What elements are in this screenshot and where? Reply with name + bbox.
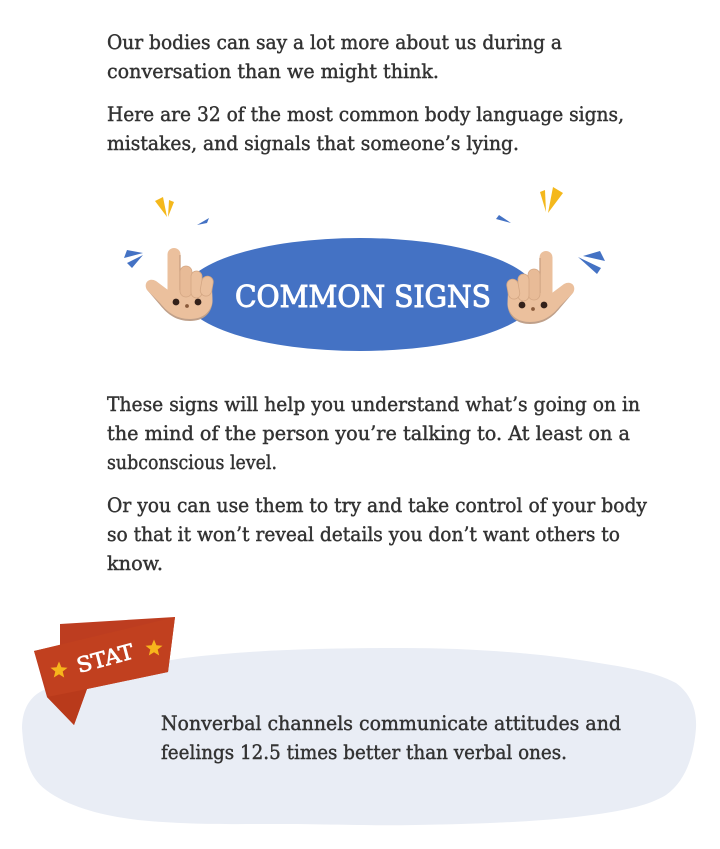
stat text bbox=[161, 712, 621, 764]
intro text block: Our bodies can say a lot more about us during a bbox=[107, 31, 562, 54]
heading: COMMON SIGNS bbox=[235, 280, 491, 315]
stat label: STAT bbox=[74, 640, 136, 678]
intro text block: mistakes, and signals that someone’s lying. bbox=[107, 132, 519, 155]
stat text: Nonverbal channels communicate attitudes and bbox=[161, 712, 621, 735]
body text block: so that it won’t reveal details you don’t want others to bbox=[107, 523, 620, 546]
stat background blob bbox=[22, 648, 696, 825]
icon: left sparks bbox=[124, 197, 209, 268]
body text block: subconscious level. bbox=[107, 451, 277, 474]
body text block: These signs will help you understand what’s going on in bbox=[107, 393, 640, 416]
icon: right hand bbox=[506, 251, 574, 324]
banner: common signs bbox=[124, 187, 605, 351]
intro text block: conversation than we might think. bbox=[107, 60, 439, 83]
body text block: know. bbox=[107, 552, 163, 575]
star bbox=[146, 640, 162, 656]
icon: right sparks bbox=[496, 187, 605, 274]
star bbox=[50, 662, 68, 678]
stat text: feelings 12.5 times better than verbal ones. bbox=[161, 741, 567, 764]
icon: left hand bbox=[146, 248, 214, 321]
panel: stat bbox=[22, 617, 696, 825]
body text block bbox=[107, 393, 647, 575]
blue ellipse bbox=[183, 238, 537, 351]
stat ribbon bbox=[34, 617, 175, 725]
body text block: Or you can use them to try and take control of your body bbox=[107, 494, 647, 517]
intro text block bbox=[107, 31, 624, 155]
intro text block: Here are 32 of the most common body language signs, bbox=[107, 103, 624, 126]
body text block: the mind of the person you’re talking to. At least on a bbox=[107, 422, 630, 445]
